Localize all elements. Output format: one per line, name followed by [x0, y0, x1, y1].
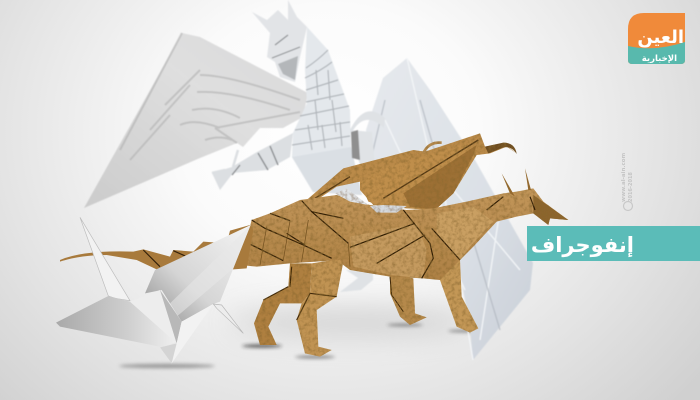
- gold dragon horns: [502, 168, 531, 197]
- banner: [527, 226, 700, 261]
- crane front wing: [56, 296, 177, 347]
- crane head and neck: [80, 217, 130, 301]
- gold dragon front legs: [390, 243, 478, 333]
- white dragon feet: [340, 270, 373, 292]
- gold dragon tail: [60, 225, 253, 269]
- white dragon left wing: [84, 33, 308, 208]
- white dragon body and neck: [292, 27, 385, 195]
- white dragon arm and claw: [212, 133, 293, 190]
- gold dragon wing hole: [335, 188, 368, 205]
- crane center fold: [130, 290, 177, 343]
- crane back wing: [145, 225, 251, 322]
- banner title: إنفوجراف: [531, 233, 634, 257]
- logo: Al-Ain News: العين: [637, 27, 684, 48]
- white dragon right wing: [366, 58, 533, 360]
- watermark: website and years: www.al-ain.com: [621, 152, 627, 202]
- logo: Al-Ain News: [628, 13, 685, 64]
- logo: Al-Ain News: الإخبارية: [642, 54, 677, 64]
- watermark: website and years: 2016-2018: [628, 172, 634, 202]
- gold dragon body: [240, 188, 568, 280]
- golden origami dragon: [240, 133, 568, 357]
- crane tail: [213, 304, 243, 333]
- origami crane: [56, 217, 251, 363]
- gold dragon wing: [307, 133, 517, 210]
- watermark: website and years: [621, 152, 634, 210]
- white dragon head and crown: [252, 0, 307, 82]
- white origami dragon: [84, 0, 533, 360]
- gold dragon hind legs: [254, 258, 344, 357]
- crane lower body: [160, 304, 213, 363]
- ground shadows: [119, 307, 484, 368]
